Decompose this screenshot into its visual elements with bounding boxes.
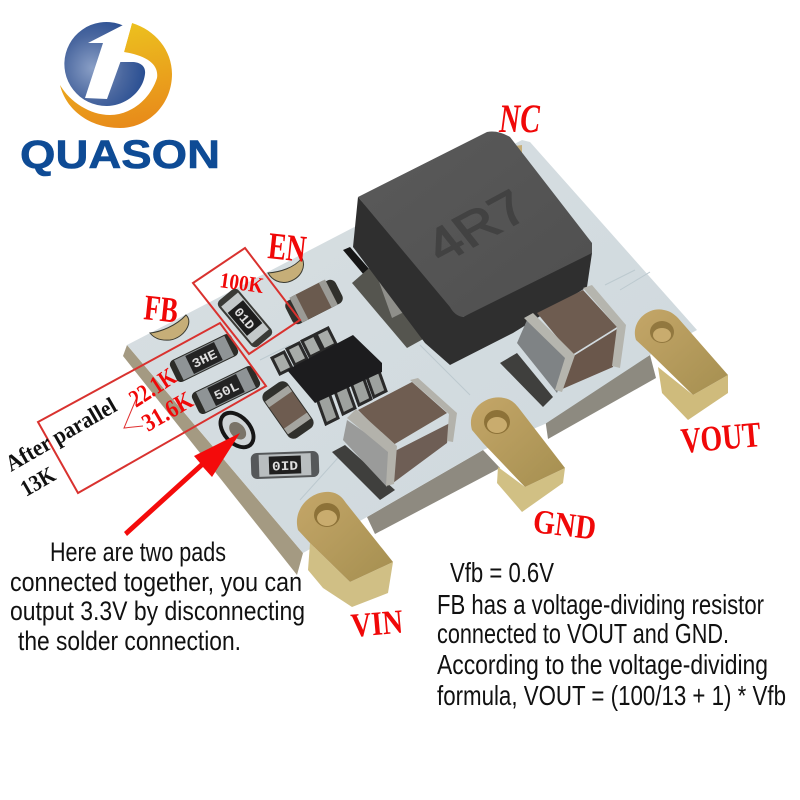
pad: FB <box>150 315 189 340</box>
resistor 22.1K <box>168 332 240 384</box>
callout box: 100K resistor <box>193 248 300 354</box>
capacitor left end <box>343 420 390 487</box>
copper traces <box>260 270 650 500</box>
logo: QUASON <box>20 22 220 177</box>
label: 22.1K: 22.1K <box>125 363 182 413</box>
capacitor top <box>537 290 617 355</box>
label: 31.6K: 31.6K <box>138 387 198 437</box>
capacitor metal bands <box>347 378 457 486</box>
text: voltage formula note <box>437 557 786 711</box>
label: VOUT: VOUT <box>679 414 762 461</box>
text: voltage formula note: Vfb = 0.6V <box>450 557 554 588</box>
inductor top face <box>358 132 592 317</box>
board edge thickness <box>123 345 303 575</box>
capacitor front <box>560 329 617 390</box>
text: solder pad note <box>10 537 305 656</box>
pad: EN <box>268 258 303 283</box>
small capacitor upper <box>282 276 345 326</box>
small capacitor lower <box>260 378 316 442</box>
capacitor metal bands <box>524 285 626 392</box>
label: After parallel: After parallel <box>1 393 121 476</box>
label: 13K: 13K <box>16 462 60 501</box>
label: EN: EN <box>266 225 308 271</box>
bracket lines between resistor values <box>124 397 143 428</box>
circuit board <box>123 132 728 607</box>
resistor 22.1K: 3HE <box>190 347 220 372</box>
IC body <box>287 335 382 403</box>
logo mark: blue disc <box>64 22 145 106</box>
capacitor solder <box>332 445 395 500</box>
resistor 31.6K <box>190 364 262 416</box>
IC pins top <box>272 328 336 374</box>
inductor marking: 4R7 <box>414 180 539 273</box>
IC pins bottom <box>316 363 386 424</box>
capacitor front <box>393 423 450 483</box>
text: solder pad note: the solder connection. <box>18 626 241 656</box>
capacitor right end <box>517 320 570 393</box>
capacitor top <box>358 382 447 445</box>
label: VIN: VIN <box>349 604 405 645</box>
logo mark: orange crescent <box>60 23 172 128</box>
label: GND: GND <box>531 503 598 548</box>
logo mark: white numeral one <box>85 22 132 99</box>
brass terminal: VIN <box>297 492 393 607</box>
inductor pad slot <box>343 247 370 275</box>
inductor 4R7 <box>353 132 592 365</box>
brass terminal: GND <box>471 397 565 512</box>
capacitor right <box>500 285 626 407</box>
resistor 31.6K: 50L <box>212 379 242 404</box>
resistor 0ID top: 01D <box>230 305 257 333</box>
text: solder pad note: Here are two pads <box>50 537 226 567</box>
arrow to solder pads <box>124 433 240 536</box>
label: FB: FB <box>142 287 180 331</box>
capacitor solder <box>500 353 553 407</box>
inductor pads left <box>352 262 425 348</box>
inductor side <box>353 197 592 365</box>
board top surface <box>127 140 697 553</box>
capacitor centre <box>332 378 457 500</box>
resistor 0ID top <box>216 287 274 349</box>
resistor 0ID bottom: 0ID <box>272 459 299 474</box>
callout box: parallel resistors <box>38 323 266 493</box>
pad: NC <box>515 145 522 155</box>
brass terminal: VOUT <box>635 309 728 420</box>
text: solder pad note: connected together, you can <box>10 567 302 597</box>
logo wordmark: QUASON <box>20 133 220 177</box>
solder bridge pads <box>211 404 263 456</box>
label: 100K: 100K <box>218 267 265 298</box>
text: solder pad note: output 3.3V by disconnecting <box>10 596 305 626</box>
resistor 0ID bottom <box>251 451 319 479</box>
IC chip <box>272 328 386 424</box>
label: NC: NC <box>498 96 541 141</box>
